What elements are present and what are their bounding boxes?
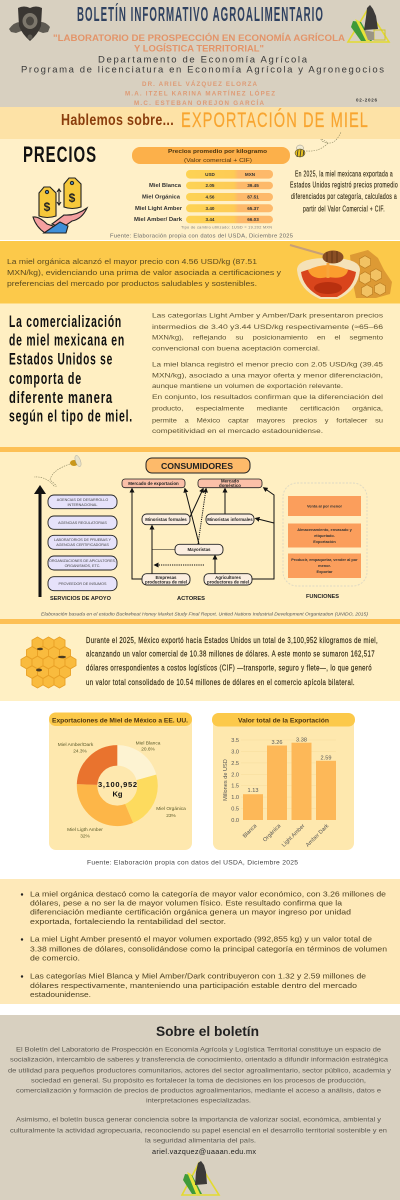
heading: market behaviour: diferente manera (9, 388, 113, 407)
finding: organic honey: La miel orgánica destacó como la categoría de mayor valor económico, con 3.26 millones de (30, 890, 386, 899)
donut labels: Miel Ligth Amber (67, 827, 103, 833)
chart source: Fuente: Elaboración propia con datos del USDA, Diciembre 2025 (87, 860, 298, 867)
icon: laboratory logo (182, 1161, 219, 1195)
functions: Exportación (313, 539, 336, 544)
price table: 39.45 (247, 183, 259, 188)
table title text: Precios promedio por kilogramo (168, 149, 268, 155)
text: about paragraph one: sociedad en general. Su propósito es fortalecer la toma de decisiones en los procesos de producción, (31, 1078, 366, 1085)
functions: menor. (318, 563, 331, 568)
bar chart: 2.5 (231, 761, 239, 767)
heading: market behaviour: La comercialización (9, 312, 122, 331)
markets (122, 478, 262, 488)
donut labels (58, 740, 186, 840)
bar chart: 3.5 (231, 738, 239, 744)
price table: 65.37 (247, 206, 259, 211)
panel: value chain diagram (0, 452, 400, 624)
bullets (21, 893, 23, 978)
text: about paragraph one (8, 1046, 392, 1105)
donut total (98, 780, 137, 798)
support services list: ORGANIZACIONES DE APICULTORES, (49, 559, 116, 563)
bar chart panel (212, 713, 355, 850)
authors: M.A. ITZEL KARINA MARTÍNEZ LÓPEZ (125, 90, 275, 98)
donut chart panel (49, 712, 192, 850)
bar chart: 1.5 (231, 784, 239, 790)
support services list: LABORATORIOS DE PRUEBAS Y (54, 538, 112, 542)
text: export totals (86, 635, 378, 687)
laboratory name: "LABORATORIO DE PROSPECCIÓN EN ECONOMÍA AGRÍCOLA (53, 32, 345, 44)
markets: doméstico (219, 483, 241, 488)
text: organic price: La miel orgánica alcanzó el mayor precio con 4.56 USD/kg (87.51 (7, 257, 257, 266)
bar chart: 1.0 (231, 795, 239, 801)
bar chart: 3.0 (231, 749, 239, 755)
bar chart: Orgánica (262, 823, 283, 843)
finding: other categories: estadounidense. (30, 990, 91, 999)
icon: laboratory logo (348, 5, 389, 42)
text: about paragraph one: comercialización y formación de precios de productos agroalimentarios, mediante el acceso a análisis, datos e (16, 1088, 382, 1095)
price table: MXN (245, 172, 256, 177)
actor arrows (132, 488, 274, 579)
panel: precios (0, 132, 400, 240)
text: about paragraph one: de utilidad para pequeños productores comunitarios, actores del sector agroalimentario, sector público, academia y (8, 1067, 392, 1074)
department (21, 54, 384, 76)
panel: export totals (0, 624, 400, 701)
price table: USD (205, 172, 216, 177)
authors: DR. ARIEL VÁZQUEZ ELORZA (142, 81, 258, 88)
finding: light amber: de comercio. (30, 954, 80, 963)
price table: Miel Light Amber (135, 206, 182, 212)
functions: Producir, empaquetar, vender al por (291, 557, 358, 562)
department: Programa de licenciatura en Economía Agrícola y Agronegocios (21, 65, 384, 76)
table title (132, 147, 290, 164)
donut labels: 20.6% (141, 746, 156, 752)
heading: market behaviour: Estados Unidos se (9, 350, 113, 369)
support services list: AGENCIAS REGULATORIAS (58, 521, 107, 525)
finding: light amber: 3.38 millones de dólares, consolidándose como la principal categoría en términos de volumen (30, 944, 387, 954)
actors: Mayoristas (188, 547, 211, 552)
topic banner: Hablemos sobre... (61, 112, 174, 129)
bar chart: 3.38 (296, 738, 307, 744)
text: about paragraph one: interpretaciones especializadas. (146, 1098, 251, 1105)
finding: organic honey: dólares, pese a no ser la de mayor volumen físico. Este resultado confirma que la (30, 898, 342, 908)
icon: dollar signs (44, 191, 76, 214)
donut labels: 32% (80, 834, 91, 840)
bar chart: 0.5 (231, 807, 239, 813)
heading: market behaviour: de miel mexicana en (9, 331, 125, 350)
text: analysis by category: convencional con buena aceptación comercial. (152, 346, 320, 353)
panel: key findings (0, 879, 400, 1004)
source: Fuente: Elaboración propia con datos del USDA, Diciembre 2025 (110, 234, 293, 240)
heading: market behaviour: comporta de (9, 369, 82, 388)
authors (125, 81, 275, 107)
authors: M.C. ESTEBAN OREJON GARCÍA (134, 99, 265, 107)
donut total: Kg (112, 790, 123, 798)
donut total: 3,100,952 (98, 780, 137, 789)
panel: organic honey highlight (0, 241, 400, 300)
heading: precios: PRECIOS (23, 142, 97, 167)
heading: market behaviour (9, 312, 133, 426)
bar chart: 2.59 (321, 756, 331, 762)
price table: 66.03 (247, 217, 259, 222)
bar chart panel: Valor total de la Exportación (238, 718, 329, 724)
functions (283, 483, 367, 586)
actors: productoras de miel (145, 580, 187, 584)
functions: etiquetado. (314, 533, 335, 538)
text: about paragraph two: Asimismo, el boletín busca generar conciencia sobre la importancia de valorizar social, económica, ambiental y (16, 1117, 382, 1124)
donut chart (87, 755, 148, 816)
text: analysis by category: MXN/kg), asociado a una mayor oferta y menor diferenciación, (152, 372, 383, 379)
text: price summary (290, 169, 398, 214)
text: organic price: MXN/kg), evidenciando una prima de valor asociada a certificaciones y (7, 268, 281, 277)
panel: market behaviour (0, 300, 400, 452)
finding: other categories (30, 972, 366, 999)
text: organic price: preferencias del mercado por productos saludables y sostenibles. (7, 279, 257, 288)
price table: 4.56 (206, 195, 215, 200)
laboratory name (53, 32, 345, 55)
contact email: ariel.vazquez@uaaan.edu.mx (152, 1147, 256, 1156)
finding: organic honey: exportada, fortaleciendo la rentabilidad del sector. (30, 917, 226, 926)
functions: Almacenamiento, envasado y (297, 527, 353, 532)
price table: 3.40 (206, 206, 215, 211)
bar chart (223, 738, 336, 849)
functions: Exportar (316, 569, 333, 574)
text: analysis by category: intermedios de 3.40 y3.44 USD/kg respectivamente (≈65–66 (152, 324, 384, 331)
column labels: SERVICIOS DE APOYO (50, 596, 111, 602)
actors: Empresas (156, 575, 177, 580)
price table: Miel Orgánica (142, 194, 180, 200)
finding: organic honey (30, 890, 386, 926)
price table (134, 170, 273, 223)
price table: Miel Blanca (149, 183, 181, 189)
icon: bee with trail (34, 455, 82, 486)
column labels: ACTORES (177, 596, 205, 602)
department: Departamento de Economía Agrícola (98, 54, 308, 66)
text: about paragraph two: culturalmente la actividad agropecuaria, reconociendo su papel esencial en el desarrollo territorial sostenible y en (10, 1127, 388, 1134)
topic banner (0, 107, 400, 139)
price table: 3.44 (206, 217, 215, 222)
table title text: (Valor comercial + CIF) (184, 158, 252, 164)
icon: dollar signs: $ (44, 200, 51, 214)
actors: Agricultores (215, 575, 241, 580)
icon: dollar signs: $ (69, 191, 76, 205)
donut labels: Miel Blanca (136, 740, 161, 746)
arrow: support services (34, 485, 46, 597)
text: analysis by category: MXN/kg), reflejando su posicionamiento en el segmento (152, 334, 383, 341)
bar chart: 2.0 (231, 772, 239, 778)
text: analysis by category: Las categorías Light Amber y Amber/Dark presentaron precios (152, 312, 384, 319)
column labels: FUNCIONES (306, 594, 339, 600)
text: about paragraph two (10, 1117, 388, 1144)
icon: bee with trail (295, 132, 341, 157)
support services list: PROVEEDOR DE INSUMOS (59, 582, 107, 586)
support services list: AGENCIAS DE DESARROLLO (57, 498, 108, 502)
bar chart: Millones de USD (223, 759, 229, 801)
text: analysis by category (152, 312, 384, 435)
icon: honeycomb (21, 637, 76, 688)
support services list: INTERNACIONAL (68, 503, 97, 507)
actors: productores de miel (207, 580, 249, 584)
support services list (48, 495, 117, 591)
donut labels: Miel Orgánica (156, 806, 186, 812)
donut chart panel: Exportaciones de Miel de México a EE. UU. (52, 718, 188, 724)
text: organic price (7, 257, 281, 288)
finding: other categories: dólares respectivamente, manteniendo una participación estable dentro del mercado (30, 981, 357, 990)
bar chart: Blanca (242, 823, 259, 840)
icon: honey bowl, dipper and comb (290, 245, 392, 299)
bar chart: Amber Dark (305, 823, 331, 849)
exchange rate note: Tipo de cambio utilizado: 1USD = 19.202 MXN (181, 226, 272, 230)
support services list: AGENCIAS CERTIFICADORAS (56, 543, 109, 547)
diagram source: Elaboración basada en el estudio Buckwheat Honey Market Study Final Report. United Nations Industrial Development Organization (UNIDO, 2015) (41, 612, 369, 617)
issue number: 02-2026 (356, 98, 377, 102)
bar chart: Light Amber (281, 823, 307, 849)
icon: price tags and hands (33, 178, 87, 233)
price table: 2.05 (206, 183, 215, 188)
finding: light amber: La miel Light Amber presentó el mayor volumen exportado (992,855 kg) y un valor total de (30, 935, 372, 944)
bar chart: 3.26 (272, 740, 282, 746)
functions: Venta al por menor (307, 504, 342, 508)
actors: Minoristas informales (207, 517, 253, 522)
consumers box: CONSUMIDORES (161, 462, 234, 471)
finding: light amber (30, 935, 387, 963)
text: analysis by category: competitividad en el mercado estadounidense. (152, 428, 323, 435)
text: analysis by category: En conjunto, los resultados confirman que la diferenciación del (152, 394, 384, 401)
markets: Mercado (221, 478, 239, 484)
donut labels: Miel Amber/Dark (58, 742, 94, 748)
laboratory name: Y LOGÍSTICA TERRITORIAL" (134, 44, 264, 55)
markets: Mercado de exportacion (128, 481, 179, 486)
column labels (50, 594, 339, 602)
support services list: ORGANISMOS, ETC. (65, 564, 100, 568)
actors: Minoristas formales (145, 517, 187, 522)
finding: other categories: Las categorías Miel Blanca y Miel Amber/Dark contribuyeron con 1.32 y 2.59 millones de (30, 972, 366, 981)
bar chart: 1.13 (248, 788, 258, 794)
text: analysis by category: producto, especialmente mediante certificación orgánica, (152, 405, 383, 412)
price table: 87.51 (247, 195, 259, 200)
icon: university crest (9, 6, 50, 41)
bar chart: 0.0 (231, 818, 239, 824)
text: about paragraph one: socialización, intercambio de saberes y transferencia de conocimiento, orientado a difundir información estratégica (10, 1057, 389, 1064)
consumers box (146, 458, 250, 473)
text: analysis by category: aunque mantiene un volumen de exportación relevante. (152, 383, 343, 390)
donut labels: 24.3% (73, 748, 88, 754)
text: about paragraph two: la seguridad alimentaria del país. (145, 1137, 256, 1144)
header band (0, 0, 400, 107)
finding: organic honey: diferenciación mediante certificación orgánica genera un mayor ingreso por unidad (30, 908, 351, 916)
actors (142, 514, 254, 585)
heading: about: Sobre el boletín (156, 1023, 259, 1039)
donut labels: 23% (166, 813, 177, 819)
text: analysis by category: permite a México captar mayores precios y fortalecer su (152, 417, 383, 424)
table title text (168, 149, 268, 164)
price table: Miel Amber/ Dark (134, 217, 182, 223)
panel: about the bulletin (0, 1015, 400, 1200)
text: analysis by category: La miel blanca registró el menor precio con 2.05 USD/kg (39.45 (152, 362, 383, 369)
heading: market behaviour: según el tipo de miel. (9, 407, 133, 426)
text: about paragraph one: El Boletín del Laboratorio de Prospección en Economía Agrícola y Logística Territorial constituye un espacio de (16, 1046, 382, 1053)
